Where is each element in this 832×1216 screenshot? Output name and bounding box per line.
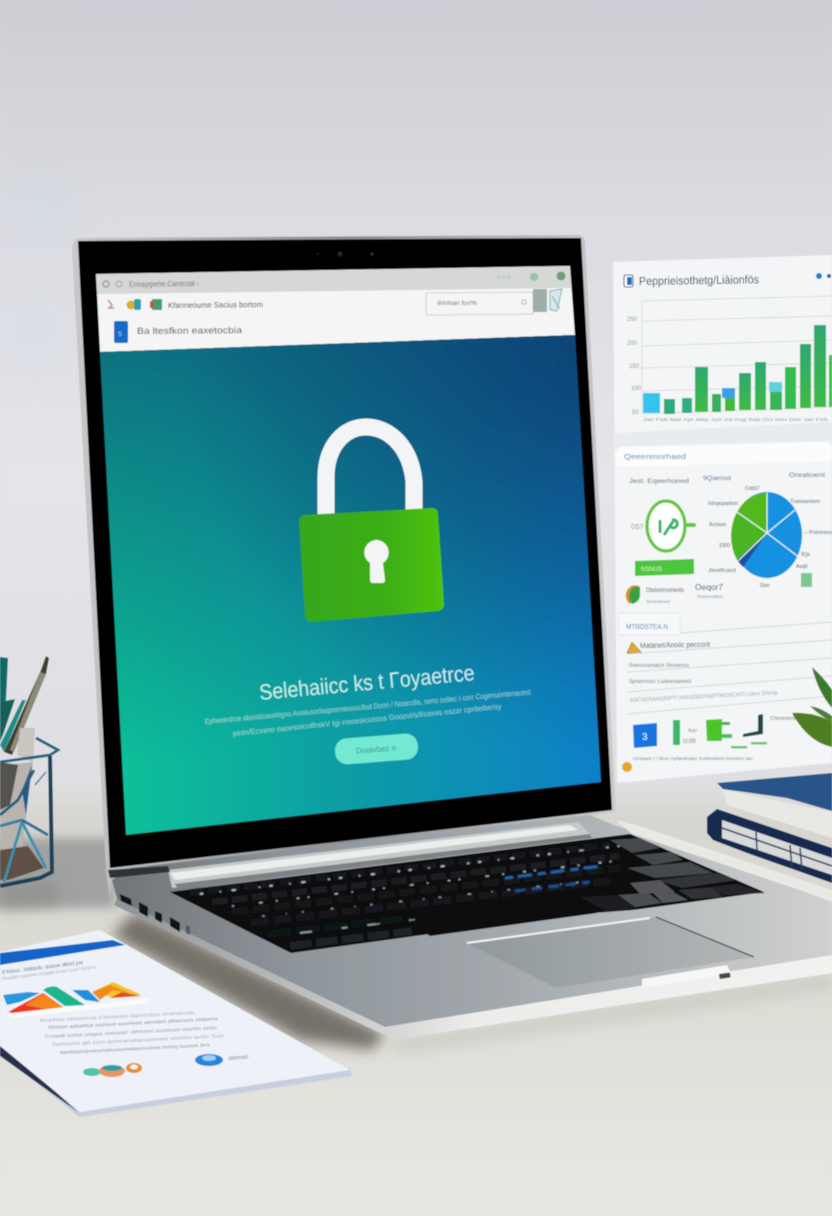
screen teal gradient xyxy=(100,335,601,835)
blue document icon and page heading: Ba ltesfkon eaxetocbia xyxy=(137,325,242,336)
blue header band xyxy=(0,940,125,965)
lower notebook xyxy=(707,809,832,883)
green ring gauge: 0S7 xyxy=(631,524,644,531)
heading icon xyxy=(624,275,633,287)
report sheet xyxy=(613,255,832,783)
donut section labels xyxy=(629,472,825,485)
metrics row: Seneatmes xyxy=(646,599,671,605)
report footer icons: Jeomsio xyxy=(228,1054,249,1062)
right side large keys xyxy=(610,838,765,907)
donut section labels: 9Qaessd xyxy=(703,475,731,482)
hinge bar xyxy=(168,822,592,889)
touchpad xyxy=(467,917,754,988)
bar chart: 200 xyxy=(627,341,638,347)
metrics row xyxy=(626,582,724,605)
faded crease band xyxy=(615,422,832,462)
spacebar xyxy=(415,903,597,936)
keyboard xyxy=(170,834,765,953)
screen body copy xyxy=(204,687,532,738)
padlock shackle xyxy=(326,427,414,516)
pie chart: Acciuss xyxy=(709,522,727,528)
page thickness xyxy=(0,1040,352,1117)
body text lines: Spraeorssc t.uidoesabeed xyxy=(629,679,691,685)
screen button xyxy=(334,733,419,765)
blue document icon and page heading: S xyxy=(118,332,122,338)
top notebook cover xyxy=(717,773,832,811)
pen holder with pens xyxy=(0,656,58,886)
soft wall tints xyxy=(10,190,70,360)
alert heading xyxy=(627,640,711,653)
touchpad edges xyxy=(467,917,754,957)
body text lines: ASCSOSAAGRIPTI NNUSSDOSEPTMOSCHITI Ueco Dhoop xyxy=(630,690,778,704)
pie chart xyxy=(708,486,832,589)
report page xyxy=(0,930,350,1112)
donut section labels: Jest. Eqeerhoned xyxy=(629,478,689,485)
laptop shadow on desk xyxy=(0,880,832,1052)
bottom icons row: U.00 xyxy=(683,739,696,745)
window dots and address xyxy=(103,279,199,289)
section tab: Qeeenmnrhaed xyxy=(624,452,686,461)
bar chart: 150 xyxy=(629,364,640,370)
top notebook pages xyxy=(723,790,832,838)
bar chart xyxy=(627,296,832,422)
search box: ⊚Inhan foo% xyxy=(437,300,477,307)
bar chart: 50 xyxy=(632,410,639,416)
bottom icons row: Auo xyxy=(688,728,697,734)
laptop base deck xyxy=(112,815,832,1027)
window dots and address: Emrayqrehe.Cwntcoal › xyxy=(129,279,199,289)
lower notebook pages xyxy=(722,820,832,875)
browser title bar xyxy=(96,266,571,294)
toolbar icons right xyxy=(497,272,566,281)
printed report on desk: Sinqabd ouqcteer oruqqat of toe coue t Nme to xyxy=(2,964,97,981)
plant leaves xyxy=(792,667,832,747)
status dots xyxy=(816,273,831,279)
donut section labels: Oreatioent xyxy=(789,472,825,479)
bottom icons row: Chrnmient xyxy=(770,716,796,722)
printed report on desk xyxy=(0,930,352,1117)
bottom icons row xyxy=(622,714,796,772)
bar chart: 250 xyxy=(627,317,638,323)
metrics row: Sotanettes xyxy=(697,594,724,600)
metrics row: Oeqor7 xyxy=(695,582,723,592)
report panel behind laptop xyxy=(613,255,832,783)
toolbar icons right: U I I 0 xyxy=(497,275,511,281)
bar chart: Jan Feb Mar Apr May Jun Jul Aug Sep Oct Nov Dec Jan Feb xyxy=(643,417,829,422)
green ring gauge xyxy=(631,501,696,551)
body text lines xyxy=(627,640,832,714)
reflection band on desk behind laptop xyxy=(0,838,115,908)
notch highlight xyxy=(642,965,731,988)
webcam dots xyxy=(317,252,374,256)
report body lines: Croiadi sufas wogoy soooopt. dihhroci ousocoic oipriits ooito xyxy=(45,1025,218,1039)
black bezel xyxy=(78,238,612,868)
screen headline: Selehaiicc ks t Γoyaetrce xyxy=(258,660,476,705)
lower tab xyxy=(619,613,832,635)
green status bar xyxy=(635,559,694,576)
pie chart: Jeoifcant xyxy=(708,568,737,574)
padlock body xyxy=(299,508,444,622)
key rows xyxy=(190,845,625,946)
pie chart: 9Qs xyxy=(801,552,811,558)
side ports xyxy=(120,894,190,935)
laptop front lip xyxy=(114,899,832,1039)
wall background xyxy=(0,0,832,800)
arrow cluster xyxy=(580,895,637,912)
padlock icon xyxy=(299,427,444,622)
report footer icons xyxy=(83,1054,249,1077)
screen browser chrome xyxy=(96,266,575,352)
pie chart: Ooo xyxy=(760,583,770,589)
green status bar: NSNUS xyxy=(641,567,662,573)
screen body copy: Epheeeshce aboisticaseitigoo Anisiusodaaprernessoc/but Doon / Noarcdis, sens ooliec I corr Cogenuontenacest xyxy=(204,687,532,726)
lid outer frame xyxy=(72,235,616,898)
bottom icons row: 3 xyxy=(642,732,648,743)
app icons and site name: Kfanneoume Sacius bortom xyxy=(168,300,263,310)
report body lines xyxy=(40,1010,225,1055)
laptop xyxy=(72,235,832,1039)
blue document icon and page heading xyxy=(114,321,242,343)
pie chart: —Pointrees xyxy=(804,530,832,536)
report body lines: Nestticlohoproesonsieucounoetioorcsoiseq ooiring Sucosia Jero xyxy=(60,1042,211,1055)
pie chart: Intopopartion xyxy=(708,501,738,507)
app icons and site name xyxy=(108,299,263,310)
panel heading: Pepprieisothetg/Liàionfös xyxy=(639,274,759,288)
alert heading: Matanet/Anoiic peccont xyxy=(640,640,711,650)
pie chart: 1000 xyxy=(719,543,730,549)
report body lines: Sernotiot gtt zzto gohcanotqoupooes sotttiisi quito Suo xyxy=(52,1033,225,1047)
stacked notebooks xyxy=(707,773,832,883)
hinge left dark edge xyxy=(108,866,170,878)
wire basket contents xyxy=(0,762,44,880)
metrics row: Dbdonmoments xyxy=(646,587,685,594)
pens xyxy=(0,656,49,755)
bright right deck stripe xyxy=(616,820,832,902)
body text lines: Reeorssmatch Stoniems xyxy=(629,663,689,669)
paper in holder xyxy=(17,728,35,763)
screen button: Doiavbez n xyxy=(356,743,396,756)
report heading: d ktsua. Jdddoib, queue dkhrt joe xyxy=(2,960,84,976)
colored area chart xyxy=(3,982,150,1018)
pie chart: Cdd37 xyxy=(745,486,760,492)
bottom icons row: Ortiaasi / / Bon Aplanitiatio Suttnetiom trieston tac xyxy=(633,756,754,762)
pie chart: Asq9 xyxy=(796,564,808,570)
pie chart: Transaniom xyxy=(790,499,820,505)
wire basket xyxy=(0,738,58,886)
section tab xyxy=(615,441,832,467)
desk surface xyxy=(0,785,832,1216)
search box xyxy=(426,289,562,315)
report body lines: Sholen adsettuit ooneuit ouorieas aeroticit diliscioos otidoms xyxy=(48,1016,219,1030)
lower tab: MTBOSTEA.N xyxy=(626,622,668,631)
report body lines: Bnbhes Nocemia Cenoetio sipocrtos eranscoto xyxy=(40,1010,196,1023)
keyhole xyxy=(364,540,389,583)
bar chart: 100 xyxy=(631,386,642,392)
screen body copy: pinin/Ecxsno oaoesoicollhskV Igi rreoesicizioss Goozvi/s/l/cionis oszzr cpriteibe/sy xyxy=(232,702,502,738)
